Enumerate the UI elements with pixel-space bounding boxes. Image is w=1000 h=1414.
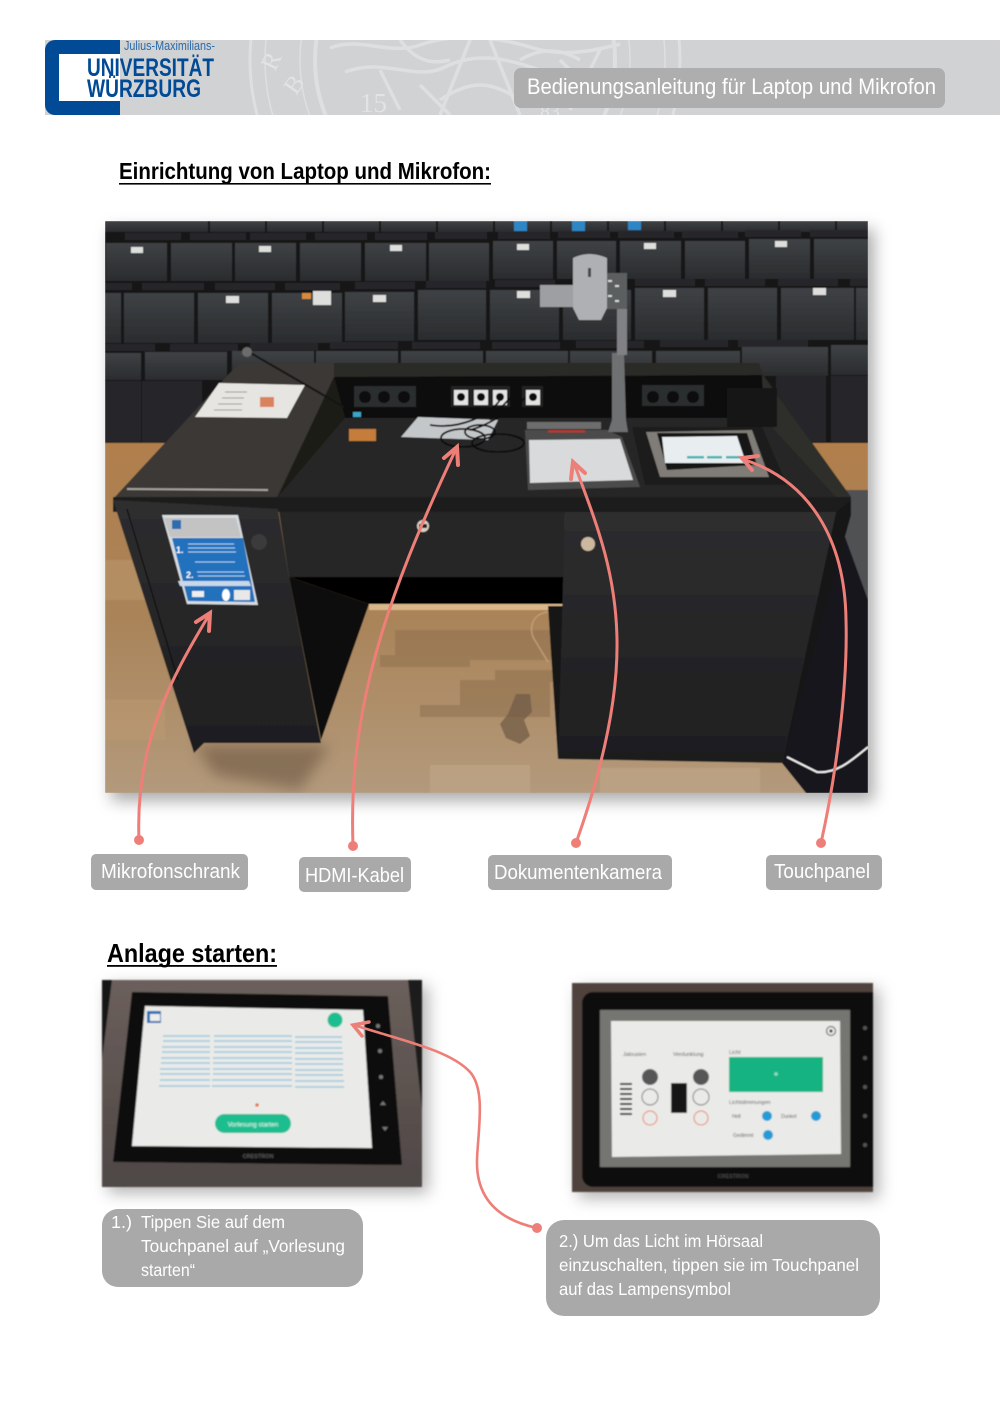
instruction box 2: einzuschalten, tippen sie im Touchpanel	[559, 1255, 859, 1275]
start button: Vorlesung starten	[228, 1122, 279, 1128]
photo: touchpanel light control: CRESTRON	[718, 1174, 748, 1180]
papers and cables	[401, 417, 498, 440]
university seal watermark: R	[256, 48, 288, 75]
right stand	[782, 512, 868, 793]
instruction box 1	[102, 1209, 363, 1287]
university seal watermark: 15	[360, 88, 387, 118]
start button	[215, 1114, 291, 1133]
desk shadow on floor	[195, 745, 330, 790]
cabinet sign: 2.	[186, 570, 194, 580]
photo shadow 2	[578, 989, 879, 1198]
light dialog: Dunkel	[781, 1114, 797, 1120]
label: HDMI-Kabel: HDMI-Kabel	[305, 865, 404, 887]
university seal watermark: 83	[540, 101, 560, 123]
logo: Julius-Maximilians-	[124, 39, 215, 53]
drawer	[279, 512, 565, 577]
seat shelves	[105, 230, 868, 351]
heading: setup: Einrichtung von Laptop und Mikrofon:	[119, 158, 491, 184]
locks	[417, 520, 429, 532]
floor	[105, 443, 868, 793]
cabinet sign: 1.	[176, 545, 184, 555]
light dialog: Licht	[729, 1050, 741, 1056]
instruction box 2: 2.) Um das Licht im Hörsaal	[559, 1231, 763, 1251]
header banner	[45, 40, 1000, 115]
light dialog	[611, 1021, 841, 1157]
box stack	[727, 388, 777, 427]
seat tags	[131, 241, 826, 305]
light dialog: Lichtstimmungen	[729, 1100, 771, 1106]
label: Dokumentenkamera: Dokumentenkamera	[494, 862, 663, 884]
arrow: lamp symbol	[353, 1022, 542, 1233]
cabinet sign	[162, 515, 258, 605]
light dialog: Verdunklung	[673, 1052, 704, 1058]
university seal watermark: B	[279, 70, 310, 99]
heading: start system: Anlage starten:	[107, 938, 277, 968]
arrow: HDMI-Kabel	[348, 447, 458, 851]
document camera	[525, 254, 640, 490]
label: Touchpanel	[766, 855, 882, 890]
label: Dokumentenkamera	[488, 855, 672, 890]
paper on desk	[195, 383, 305, 418]
title pill	[514, 68, 945, 108]
instruction box 1: Touchpanel auf „Vorlesung	[141, 1236, 345, 1256]
light dialog: Hell	[732, 1114, 741, 1120]
instruction box 1: 1.)	[111, 1212, 132, 1232]
under desk and floor details	[289, 577, 565, 604]
light dialog: Jalousien	[623, 1052, 646, 1058]
photo: touchpanel start screen	[102, 980, 422, 1187]
left cabinet	[113, 500, 321, 753]
photo: touchpanel start screen: CRESTRON	[243, 1154, 273, 1160]
logo	[45, 39, 215, 115]
seats	[105, 221, 868, 380]
photo shadow 1	[108, 986, 428, 1193]
photo: lecture desk	[105, 221, 868, 793]
arrow: Dokumentenkamera	[571, 462, 617, 848]
photo: touchpanel light control	[572, 983, 873, 1192]
arrow: Touchpanel	[742, 456, 846, 848]
floor stain	[500, 694, 532, 744]
arrow: Mikrofonschrank	[134, 613, 210, 845]
info table	[159, 1036, 344, 1087]
label: Touchpanel: Touchpanel	[774, 861, 870, 883]
label: Mikrofonschrank: Mikrofonschrank	[101, 861, 241, 883]
desk top	[146, 363, 846, 498]
label: Mikrofonschrank	[91, 854, 248, 890]
logo: WÜRZBURG	[87, 74, 201, 103]
touch panel on desk	[632, 427, 787, 485]
title pill: Bedienungsanleitung für Laptop und Mikrofon	[527, 74, 936, 99]
photo shadow	[111, 229, 874, 801]
right cabinet	[558, 512, 836, 763]
university seal watermark	[248, 40, 682, 115]
instruction box 1: starten“	[141, 1260, 195, 1280]
microphone	[249, 352, 344, 407]
instruction box 2	[546, 1220, 880, 1316]
logo: UNIVERSITÄT	[87, 54, 214, 82]
light dialog: Gedimmt	[733, 1133, 754, 1139]
instruction box 1: Tippen Sie auf dem	[141, 1212, 285, 1232]
instruction box 2: auf das Lampensymbol	[559, 1279, 731, 1299]
sockets	[354, 385, 704, 407]
lower seats at the sides	[105, 376, 868, 447]
label: HDMI-Kabel	[299, 857, 411, 892]
